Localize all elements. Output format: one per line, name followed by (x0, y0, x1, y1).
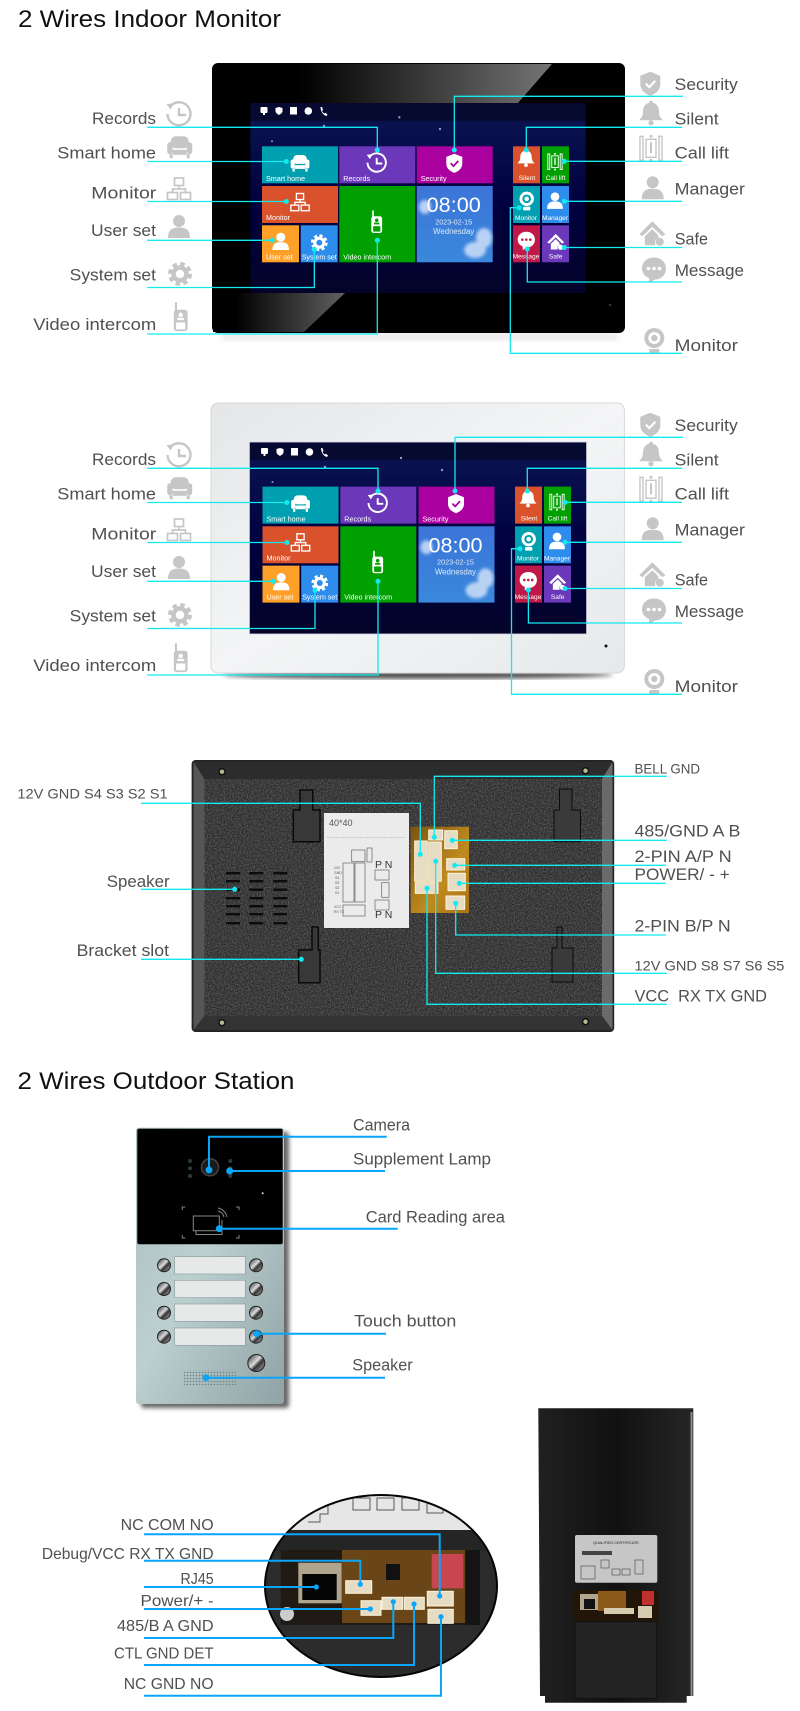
sticker diagrams (308, 1498, 443, 1522)
right labels: Safe (675, 229, 708, 248)
panel: monitor rear view (192, 760, 614, 1032)
panel: circular terminal detail (260, 1490, 500, 1680)
left labels: Video intercom (33, 656, 156, 675)
tile: clock: 08:00 (427, 192, 481, 217)
callouts: terminal detail labels (42, 1517, 444, 1696)
wiring label sticker: VCC (334, 905, 342, 909)
panel: black indoor monitor (212, 63, 625, 341)
white monitor body (211, 403, 624, 673)
tile: monitor small: Monitor (517, 555, 540, 562)
wiring label sticker: 12V (334, 866, 341, 870)
tile: silent: Silent (519, 175, 535, 182)
wiring label sticker: P N (375, 859, 392, 871)
keyhole slot: top left (293, 790, 320, 842)
tile: smart home (262, 146, 338, 183)
rear labels (17, 760, 785, 1006)
right labels: Safe (675, 570, 708, 589)
rear body (192, 760, 614, 1032)
rear leader dots (232, 835, 462, 962)
tile: smart home: Smart home (266, 174, 305, 183)
board (281, 1550, 480, 1625)
monitor shadow (223, 671, 613, 679)
callouts: outdoor station front (202, 1116, 506, 1381)
left labels: System set (70, 266, 156, 285)
screen background (250, 103, 586, 293)
rear labels: 12V GND S8 S7 S6 S5 (634, 958, 785, 974)
tile: monitor (262, 186, 338, 223)
leader lines (147, 96, 683, 353)
panel: white indoor monitor (211, 403, 624, 679)
stars (271, 116, 441, 142)
outdoor labels (352, 1116, 506, 1375)
certificate label (575, 1535, 657, 1583)
tile: clock (417, 186, 493, 262)
title: indoor monitor: 2 Wires Indoor Monitor (18, 6, 281, 33)
left icons (166, 443, 192, 672)
dark housing (260, 1490, 500, 1680)
back housing (538, 1408, 693, 1703)
right labels: Silent (675, 109, 719, 128)
outdoor labels: Camera (353, 1116, 411, 1134)
right labels: Message (675, 602, 744, 621)
outdoor leader lines (206, 1137, 398, 1378)
tile: system set (301, 566, 338, 603)
right dark strip (466, 1550, 480, 1625)
left labels: Monitor (91, 183, 157, 202)
wiring label sticker (324, 813, 409, 928)
capacitor (280, 1607, 294, 1621)
certificate label: QUALIFIED CERTIFICATE (593, 1541, 639, 1545)
screen background (249, 442, 587, 634)
left icons (166, 102, 192, 331)
leader lines (147, 437, 683, 694)
outdoor labels: Supplement Lamp (353, 1150, 491, 1168)
tile: security: Security (421, 174, 447, 183)
wiring label sticker: 40*40 (329, 818, 353, 828)
right labels: Security (675, 416, 738, 435)
tile: user set (262, 566, 300, 603)
top gloss reflection (300, 64, 552, 103)
tile: records: Records (344, 514, 371, 523)
band (260, 1530, 500, 1551)
speaker grille (184, 1370, 236, 1385)
outdoor labels: Speaker (352, 1356, 413, 1375)
wiring label sticker: RX TX (334, 910, 345, 914)
tile: video intercom (339, 186, 415, 262)
leds (188, 1159, 232, 1178)
tile: user set: User set (266, 252, 293, 261)
right labels: Manager (675, 179, 745, 198)
surface grain (204, 779, 602, 1016)
monitor reflection shadow (222, 332, 618, 341)
tile: records (339, 146, 415, 183)
red relay (432, 1554, 463, 1588)
panel: outdoor station front (136, 1128, 289, 1408)
wiring label sticker: GND (334, 871, 342, 875)
tile: system set: System set (302, 593, 337, 602)
tile: safe: Safe (549, 254, 563, 260)
inner textured surface (204, 779, 602, 1016)
rear labels: 485/GND A B (634, 822, 740, 840)
stars (272, 457, 443, 483)
tile: security: Security (422, 514, 449, 523)
tile: clock: 2023-02-15 (435, 217, 472, 226)
status bar icons (260, 107, 328, 116)
right labels (675, 75, 745, 355)
right icons (639, 72, 666, 354)
left labels (33, 109, 157, 334)
tile: call lift: Call lift (548, 515, 568, 522)
tile: call lift: Call lift (546, 175, 566, 182)
black monitor body (212, 63, 625, 333)
left labels: Monitor (91, 524, 157, 543)
tile: security (417, 146, 493, 183)
callouts: rear view labels and leader lines (17, 760, 785, 1006)
tile: monitor small: Monitor (515, 215, 538, 222)
terminal labels: NC COM NO (121, 1517, 214, 1534)
bevel top (194, 762, 612, 779)
rj45 opening (302, 1574, 337, 1600)
tile: video intercom: Video intercom (343, 252, 391, 261)
circuit board window (411, 827, 469, 913)
tile: records (340, 487, 416, 524)
tile: message: Message (515, 594, 542, 601)
terminal labels: CTL GND DET (114, 1645, 214, 1662)
wiring label sticker: S3 (335, 881, 339, 885)
tile: clock: Wednesday (433, 227, 474, 236)
tile: smart home (262, 487, 338, 524)
right tiles (515, 487, 571, 603)
callouts: white monitor labels and leader lines (33, 413, 745, 696)
right labels: Message (675, 261, 744, 280)
black chip (386, 1564, 400, 1580)
left labels: Records (92, 450, 156, 469)
sensor dot (262, 1192, 264, 1194)
right labels (675, 416, 745, 696)
left labels: Video intercom (33, 315, 156, 334)
name plates (175, 1257, 245, 1345)
title: outdoor station: 2 Wires Outdoor Station (18, 1068, 294, 1095)
circle border (264, 1494, 498, 1678)
status bar icons (261, 448, 328, 457)
left tiles (262, 146, 493, 262)
black glass top (137, 1129, 283, 1244)
bevel bottom (194, 1016, 612, 1030)
side edge highlight (690, 1412, 692, 1696)
tile: manager: Manager (544, 555, 571, 562)
rear labels: BELL GND (634, 760, 700, 776)
camera lens (202, 1159, 218, 1176)
wiring label sticker: P N (375, 909, 392, 921)
terminal leader dots (314, 1582, 444, 1619)
screws (219, 768, 588, 1026)
left labels: User set (91, 221, 156, 240)
tile: user set: User set (266, 593, 293, 602)
right tiles (513, 146, 569, 262)
keyhole slot: bottom right (552, 927, 573, 982)
left tiles (262, 487, 494, 603)
tile: monitor (262, 526, 338, 563)
terminal labels: NC GND NO (124, 1676, 214, 1693)
outdoor labels: Card Reading area (366, 1208, 506, 1226)
leader dots (270, 148, 567, 252)
rear labels: POWER/ - + (634, 865, 730, 884)
tile: clock: 08:00 (428, 532, 483, 557)
left labels: Smart home (57, 484, 156, 504)
right labels: Security (675, 75, 738, 94)
sticker strip (291, 1496, 471, 1530)
tile: monitor: Monitor (266, 553, 291, 562)
microphone hole (609, 304, 611, 306)
tile: system set: System set (302, 252, 337, 261)
tile: clock (418, 526, 494, 603)
right labels: Monitor (675, 677, 738, 696)
tile: records: Records (343, 174, 370, 183)
aluminium body (136, 1128, 284, 1404)
wiring label sticker: S1 (335, 891, 339, 895)
tile: video intercom: Video intercom (344, 593, 392, 602)
tile: video intercom (340, 526, 416, 603)
tile: silent: Silent (521, 515, 537, 522)
terminal labels: RJ45 (180, 1571, 214, 1588)
pcb window (573, 1590, 658, 1622)
outdoor leader dots (202, 1166, 260, 1381)
bottom gloss reflection (213, 293, 345, 332)
touch buttons (158, 1259, 265, 1372)
lower cover (575, 1622, 657, 1698)
tile: monitor: Monitor (266, 213, 291, 222)
outdoor labels: Touch button (354, 1312, 456, 1330)
tile: safe: Safe (551, 594, 565, 601)
left labels: User set (91, 562, 156, 581)
right labels: Call lift (675, 485, 729, 504)
bevel right (602, 762, 612, 1030)
bevel left (194, 762, 204, 1030)
tile: clock: Wednesday (435, 567, 476, 576)
wiring label sticker: S4 (335, 876, 339, 880)
right icons (639, 413, 666, 695)
microphone hole (604, 644, 608, 648)
rear labels: 12V GND S4 S3 S2 S1 (17, 786, 168, 802)
keyhole slot: top right (554, 789, 580, 842)
rear labels: VCC RX TX GND (634, 986, 767, 1006)
right labels: Monitor (675, 336, 738, 355)
rear labels: 2-PIN B/P N (634, 916, 731, 936)
panel: outdoor station back (538, 1408, 693, 1703)
tile: smart home: Smart home (266, 514, 306, 523)
card reader icon (182, 1207, 239, 1238)
tile: security (418, 487, 494, 524)
connectors (346, 1581, 453, 1623)
tile: manager: Manager (542, 215, 569, 222)
tile: clock: 2023-02-15 (437, 558, 474, 567)
right labels: Silent (675, 450, 719, 469)
terminal leader lines (144, 1534, 441, 1696)
speaker slots (226, 872, 287, 924)
callouts: black monitor labels and leader lines (33, 72, 745, 355)
left labels: Smart home (57, 144, 156, 162)
right labels: Manager (675, 520, 745, 539)
terminal labels: 485/B A GND (117, 1618, 214, 1635)
tile: user set (262, 225, 299, 262)
rear leader lines (141, 776, 667, 1004)
terminal labels: Power/+ - (140, 1593, 214, 1610)
tile: system set (301, 225, 338, 262)
left labels (33, 450, 157, 675)
rj45 socket (298, 1563, 342, 1603)
left labels: Records (92, 109, 156, 128)
circle contents (260, 1490, 500, 1680)
leader dots (270, 488, 568, 593)
rear labels: Speaker (107, 872, 170, 891)
pcb details (580, 1591, 654, 1618)
terminal labels (42, 1517, 214, 1693)
brown pcb patch (342, 1550, 465, 1623)
terminal connectors (415, 830, 465, 909)
drop shadow (141, 1132, 289, 1408)
keyhole slot: bottom left (299, 927, 320, 983)
tile: message: Message (513, 254, 540, 260)
left labels: System set (70, 607, 156, 626)
wiring label sticker: S2 (335, 886, 339, 890)
rear labels: Bracket slot (77, 941, 169, 960)
rear labels: 2-PIN A/P N (634, 847, 732, 866)
right labels: Call lift (675, 144, 729, 163)
terminal labels: Debug/VCC RX TX GND (42, 1546, 214, 1563)
